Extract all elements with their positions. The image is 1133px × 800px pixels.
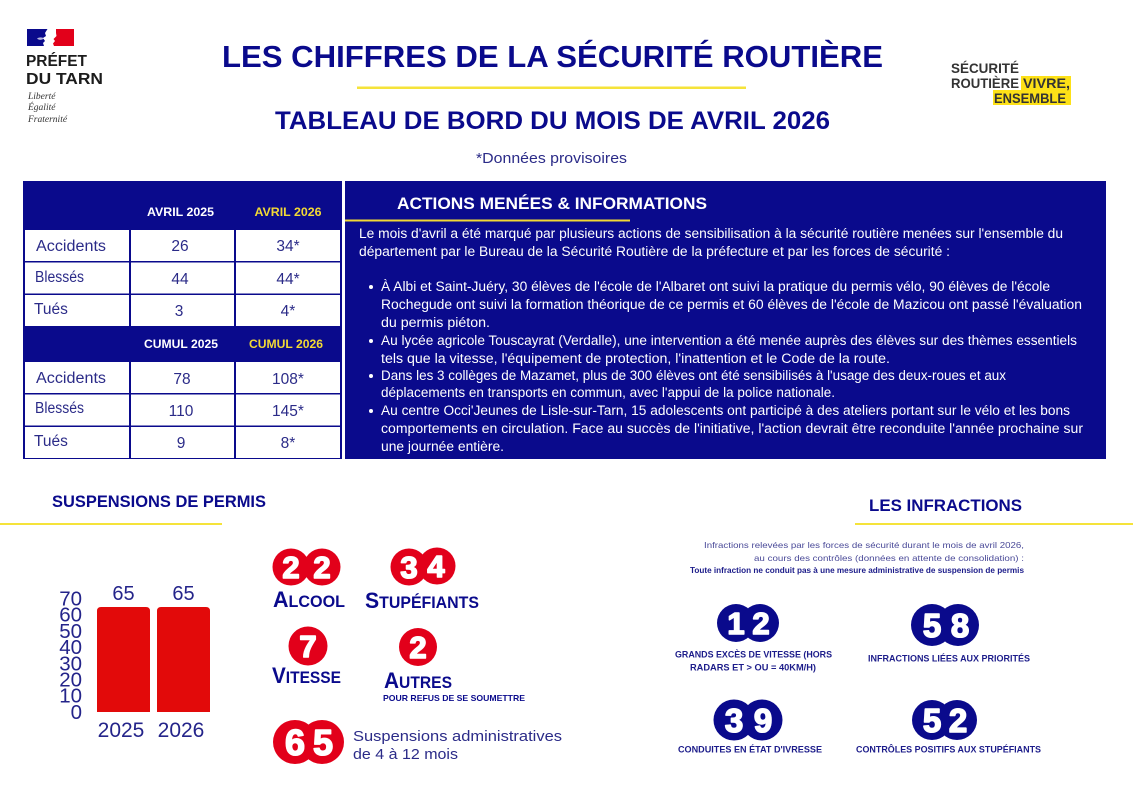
stat: 65 suspensions administratives xyxy=(273,720,562,764)
cumulative rows xyxy=(25,362,340,458)
y axis labels: 20 xyxy=(59,668,82,692)
bullet: Touscayrat: tels que la vitesse, l'équipement de protection, l'inattention et le Code de la route. xyxy=(381,351,890,366)
y axis labels: 30 xyxy=(59,652,82,676)
April rows: 34* xyxy=(276,238,300,255)
heading: actions: ACTIONS MENÉES & INFORMATIONS xyxy=(397,194,707,213)
y axis labels: 0 xyxy=(71,701,82,724)
bullet: Albi: du permis piéton. xyxy=(381,315,490,330)
stat: stupéfiants 34: 3 xyxy=(400,550,418,585)
stat: 12 grands excès de vitesse: GRANDS EXCÈS DE VITESSE (HORS xyxy=(675,648,832,660)
logo: Préfet du Tarn: Liberté xyxy=(27,92,56,102)
bullet: Touscayrat xyxy=(369,333,1077,366)
cumulative rows: Blessés xyxy=(35,400,84,417)
April rows: 44 xyxy=(171,271,189,288)
provisional data note: *Données provisoires xyxy=(476,151,627,167)
stat: autres 2 xyxy=(383,628,525,703)
stat: alcool 22: ALCOOL xyxy=(273,587,345,612)
bar 2025: 65 xyxy=(112,583,135,605)
y axis labels: 70 xyxy=(59,588,82,610)
logo: Préfet du Tarn: Égalité xyxy=(27,101,56,113)
heading: April columns: AVRIL 2025 xyxy=(147,207,215,219)
heading: suspensions de permis: SUSPENSIONS DE PERMIS xyxy=(52,493,266,511)
logo: Préfet du Tarn xyxy=(26,29,103,125)
logo: Préfet du Tarn: PRÉFET xyxy=(26,53,88,70)
stat: autres 2: AUTRES xyxy=(384,668,452,693)
bullet: Lisle-sur-Tarn xyxy=(369,403,1084,454)
stat: autres 2: 2 xyxy=(409,630,427,665)
bullet: Mazamet: Dans les 3 collèges de Mazamet, plus de 300 élèves ont été sensibilisés à l'usage des deux-roues et aux xyxy=(381,368,1006,383)
stat: alcool 22 xyxy=(272,548,345,612)
logo: Sécurité routière xyxy=(951,60,1071,106)
cumulative rows: 8* xyxy=(281,435,295,452)
cumulative rows: 145* xyxy=(272,403,304,420)
stat: 39 conduites en état d'ivresse: 9 xyxy=(754,702,772,739)
stat: 52 contrôles stupéfiants: 2 xyxy=(949,702,967,739)
infractions intro text: Toute infraction ne conduit pas à une mesure administrative de suspension de permis xyxy=(690,566,1025,575)
logo: Sécurité routière: VIVRE, xyxy=(1023,75,1070,91)
bar 2026: 2026 xyxy=(158,719,204,742)
cumulative rows: 78 xyxy=(173,371,191,388)
bar 2025: 2025 xyxy=(98,719,144,742)
bullet: Mazamet xyxy=(369,368,1006,400)
stat: 58 infractions priorités: 8 xyxy=(951,607,969,644)
stat: 65 suspensions administratives: de 4 à 12 mois xyxy=(353,746,458,763)
y axis labels xyxy=(59,588,82,724)
April rows xyxy=(25,230,340,326)
heading: cumulative columns xyxy=(144,339,323,351)
cumulative rows: 9 xyxy=(177,435,185,452)
intro paragraph xyxy=(359,226,1063,259)
stat: vitesse 7: VITESSE xyxy=(272,663,341,688)
stat: 65 suspensions administratives: Suspensions administratives xyxy=(353,728,562,745)
stat: stupéfiants 34: 4 xyxy=(427,549,445,584)
panel: actions and information xyxy=(345,181,1106,459)
heading: cumulative columns: CUMUL 2026 xyxy=(249,339,323,351)
logo: Sécurité routière: ROUTIÈRE xyxy=(951,75,1019,91)
y axis labels: 40 xyxy=(59,636,82,659)
April rows: Tués xyxy=(34,301,68,318)
cumulative rows: Tués xyxy=(34,433,68,450)
cumulative rows: Accidents xyxy=(36,370,106,387)
bar 2026 xyxy=(157,583,210,742)
infractions intro text: au cours des contrôles (données en attente de consolidation) : xyxy=(754,553,1024,563)
bullet: Lisle-sur-Tarn: Au centre Occi'Jeunes de Lisle-sur-Tarn, 15 adolescents ont participé à des ateliers portant sur le vélo et les bons xyxy=(381,403,1070,418)
stat: alcool 22: 2 xyxy=(313,550,331,585)
stat: 65 suspensions administratives: 5 xyxy=(313,722,333,763)
April rows: Blessés xyxy=(35,269,84,286)
infractions intro text xyxy=(690,540,1025,575)
bar 2025 xyxy=(97,583,150,742)
cumulative rows: 110 xyxy=(169,403,194,420)
heading: les infractions: LES INFRACTIONS xyxy=(869,497,1022,515)
stat: 65 suspensions administratives: 6 xyxy=(285,722,305,763)
April rows: 3 xyxy=(175,303,183,320)
infractions intro text: Infractions relevées par les forces de sécurité durant le mois de avril 2026, xyxy=(704,540,1024,550)
intro paragraph: département par le Bureau de la Sécurité Routière de la préfecture et par les forces de sécurité : xyxy=(359,244,950,259)
stat: vitesse 7 xyxy=(272,626,341,688)
stat: vitesse 7: 7 xyxy=(299,629,317,664)
bullet: Lisle-sur-Tarn: comportements en circulation. Face au succès de l'initiative, l'action devrait être reconduite l'année prochaine sur xyxy=(381,421,1084,436)
stat: 12 grands excès de vitesse: RADARS ET > OU = 40KM/H) xyxy=(690,662,816,672)
bar chart: suspensions 2025 vs 2026 xyxy=(59,583,210,742)
cumulative rows: 108* xyxy=(272,371,304,388)
subtitle: TABLEAU DE BORD DU MOIS DE AVRIL 2026 xyxy=(275,107,830,135)
stat: 52 contrôles stupéfiants: 5 xyxy=(923,702,941,739)
y axis labels: 50 xyxy=(59,620,82,643)
stat: 12 grands excès de vitesse xyxy=(675,604,832,672)
stat: 39 conduites en état d'ivresse xyxy=(678,700,822,754)
logo: Préfet du Tarn: DU TARN xyxy=(26,71,103,88)
stat: 12 grands excès de vitesse: 2 xyxy=(752,606,770,641)
stat: autres 2: POUR REFUS DE SE SOUMETTRE xyxy=(383,693,525,703)
stat: 58 infractions priorités: INFRACTIONS LIÉES AUX PRIORITÉS xyxy=(868,652,1030,664)
stat: stupéfiants 34 xyxy=(365,548,479,613)
bullet: Albi: Rochegude ont suivi la formation théorique de ce permis et 60 élèves de l'école de Mazicou ont passé l'évaluation xyxy=(381,297,1082,312)
bullet: Albi xyxy=(369,279,1082,330)
intro paragraph: Le mois d'avril a été marqué par plusieurs actions de sensibilisation à la sécurité routière menées sur l'ensemble du xyxy=(359,226,1063,241)
April rows: 26 xyxy=(171,238,189,255)
stat: 39 conduites en état d'ivresse: CONDUITES EN ÉTAT D'IVRESSE xyxy=(678,744,822,754)
bullet: Lisle-sur-Tarn: une journée entière. xyxy=(381,439,504,454)
y axis labels: 10 xyxy=(59,684,82,708)
stat: 39 conduites en état d'ivresse: 3 xyxy=(725,702,743,739)
stat: 52 contrôles stupéfiants: CONTRÔLES POSITIFS AUX STUPÉFIANTS xyxy=(856,744,1041,754)
title: LES CHIFFRES DE LA SÉCURITÉ ROUTIÈRE xyxy=(222,39,883,74)
bar 2026: 65 xyxy=(172,583,195,605)
bullet: Mazamet: déplacements en transports en commun, avec l'appui de la police nationale. xyxy=(381,385,835,400)
logo: Préfet du Tarn: Fraternité xyxy=(27,115,68,125)
stat: 12 grands excès de vitesse: 1 xyxy=(727,606,745,641)
stat: 58 infractions priorités xyxy=(868,604,1030,664)
bullet: Albi: À Albi et Saint-Juéry, 30 élèves de l'école de l'Albaret ont suivi la pratique du permis vélo, 90 élèves de l'école xyxy=(381,279,1050,294)
stat: 58 infractions priorités: 5 xyxy=(923,607,941,644)
logo: Sécurité routière: SÉCURITÉ xyxy=(951,60,1019,76)
icon: Marianne flag xyxy=(27,29,74,46)
heading: cumulative columns: CUMUL 2025 xyxy=(144,339,219,351)
logo: Sécurité routière: ENSEMBLE xyxy=(994,90,1066,106)
April rows: 4* xyxy=(281,303,295,320)
stat: stupéfiants 34: STUPÉFIANTS xyxy=(365,588,479,613)
April rows: Accidents xyxy=(36,238,106,255)
y axis labels: 60 xyxy=(59,604,82,626)
panel: statistics table xyxy=(23,181,342,459)
April rows: 44* xyxy=(276,271,300,288)
stat: alcool 22: 2 xyxy=(282,550,300,585)
heading: April columns: AVRIL 2026 xyxy=(254,207,322,219)
stat: 52 contrôles stupéfiants xyxy=(856,700,1041,754)
bullet: Touscayrat: Au lycée agricole Touscayrat (Verdalle), une intervention a été menée auprès des élèves sur des thèmes essentiels xyxy=(381,333,1077,348)
heading: April columns xyxy=(147,207,322,219)
